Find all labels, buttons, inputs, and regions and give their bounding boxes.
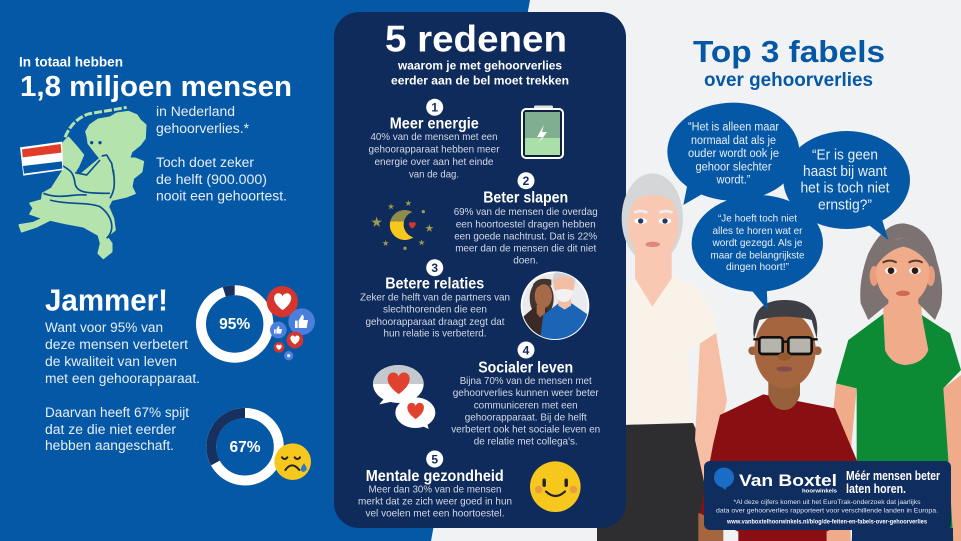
reason 2: beter slapen: 2 [523, 174, 530, 188]
quote 1: wordt.” [716, 175, 751, 187]
slogan: laten horen. [846, 482, 906, 496]
reason 2: beter slapen: meer dan de mensen die dit niet [455, 243, 596, 255]
text: 95 percent [45, 320, 200, 386]
person: man with glasses [698, 300, 858, 541]
text: 95 percent: met een gehoorapparaat. [45, 371, 200, 386]
reason 3: betere relaties: gehoorapparaat draagt zegt dat [366, 316, 505, 328]
reason 2: beter slapen: Beter slapen [483, 190, 568, 207]
person: woman in green shirt [827, 223, 961, 541]
intro heading: In totaal hebben [19, 54, 123, 70]
reason 1: meer energie: gehoorapparaat hebben meer [368, 144, 500, 156]
reason 4: socialer leven: Bijna 70% van de mensen met [460, 375, 592, 387]
logo: Van Boxtel: hoorwinkels [802, 489, 837, 495]
icon: social reactions [267, 286, 315, 360]
reason 2: beter slapen: 69% van de mensen die overdag [454, 206, 598, 218]
quote 1: “Het is alleen maar [688, 122, 779, 134]
reason 4: socialer leven: communiceren met een [474, 399, 578, 411]
intro heading: 1,8 miljoen mensen [20, 71, 292, 103]
icon: smiley [530, 461, 581, 512]
panel heading: waarom je met gehoorverlies [397, 60, 562, 72]
reason 1: meer energie: energie over aan het einde [374, 156, 494, 168]
quote 1: normaal dat als je [691, 135, 776, 147]
reason 2: beter slapen: doen. [513, 254, 538, 266]
reason 5: mentale gezondheid: merkt dat ze zich weer goed in hun [358, 496, 512, 508]
reason 3: betere relaties: Zeker de helft van de partners van [360, 292, 510, 304]
slogan: Méér mensen beter [846, 469, 940, 483]
icon: battery [522, 106, 563, 158]
reason 5: mentale gezondheid: vel voelen met een hoortoestel. [366, 508, 504, 520]
logo: Van Boxtel [714, 468, 837, 495]
text: 95 percent: de kwaliteit van leven [45, 354, 177, 369]
quote 2: ernstig?” [818, 196, 872, 213]
quote 2: haast bij want [803, 163, 888, 180]
reason 1: meer energie: van de dag. [409, 168, 459, 180]
quote 2: het is toch niet [800, 180, 890, 197]
icon: speech bubbles with hearts [373, 365, 435, 429]
heading: Jammer: Jammer! [45, 282, 168, 318]
intro heading [19, 54, 292, 103]
icon: moon and stars [371, 200, 433, 250]
text: 67 percent: hebben aangeschaft. [45, 438, 174, 453]
reason 3: betere relaties [360, 259, 510, 340]
footnote and url: www.vanboxtelhoorwinkels.nl/blog/de-feiten-en-fabels-over-gehoorverlies [726, 519, 928, 525]
text: 67 percent [45, 405, 189, 453]
reason 5: mentale gezondheid [358, 450, 512, 520]
quote 3: maar de belangrijkste [710, 249, 805, 261]
reason 3: betere relaties: Betere relaties [385, 276, 484, 293]
panel heading: eerder aan de bel moet trekken [391, 76, 569, 88]
intro text: Toch doet zeker [156, 155, 255, 170]
intro text [156, 104, 287, 204]
intro text: gehoorverlies.* [156, 121, 250, 136]
reason 2: beter slapen: een goede nachtrust. Dat is 22% [454, 230, 597, 242]
reason 5: mentale gezondheid: Mentale gezondheid [366, 468, 504, 485]
footnote and url: data over gehoorverlies rapporteert voor verschillende landen in Europa. [716, 508, 938, 514]
donut chart 95 percent: 95% [219, 316, 250, 333]
quote 3: alles te horen wat er [712, 225, 803, 237]
map of the Netherlands with flag [19, 107, 146, 258]
reason 4: socialer leven: 4 [523, 343, 530, 357]
quote 2 [800, 146, 890, 213]
reason 5: mentale gezondheid: Meer dan 30% van de mensen [368, 484, 502, 496]
reason 3: betere relaties: slechthorenden die een [383, 304, 487, 316]
donut chart 95 percent [201, 290, 268, 358]
quote 3: dingen hoort!” [726, 261, 789, 273]
person: older woman [620, 173, 727, 500]
panel: 5 redenen [334, 12, 626, 528]
reason 4: socialer leven [451, 342, 600, 447]
skirt of older woman behind panel [597, 423, 710, 541]
quote 3: “Je hoeft toch niet [718, 213, 797, 225]
donut chart 67 percent: 67% [229, 439, 261, 456]
footnote and url: *Al deze cijfers komen uit het EuroTrak-onderzoek dat jaarlijks [734, 499, 921, 506]
logo: Van Boxtel: Van Boxtel [739, 471, 837, 490]
text: 95 percent: deze mensen verbetert [45, 337, 188, 352]
reason 4: socialer leven: Socialer leven [478, 359, 573, 376]
intro text: nooit een gehoortest. [156, 188, 287, 204]
donut chart 67 percent [211, 413, 279, 481]
text: 67 percent: dat ze die niet eerder [45, 422, 177, 437]
quote 1: gehoor slechter [696, 161, 772, 173]
icon: sad face [274, 443, 311, 480]
navy trousers below banner [852, 528, 953, 541]
footnote and url [716, 499, 938, 525]
intro text: de helft (900.000) [156, 172, 267, 187]
footer banner: Van Boxtel [704, 461, 951, 530]
icon: couple portrait [521, 269, 590, 340]
reason 4: socialer leven: de relatie met collega's. [474, 435, 578, 447]
text: 67 percent: Daarvan heeft 67% spijt [45, 405, 189, 420]
reason 2: beter slapen: een hoortoestel dragen hebben [456, 218, 596, 230]
quote 1: ouder wordt ook je [688, 148, 779, 160]
quote 3 [710, 213, 805, 273]
reason 3: betere relaties: hun relatie is verbeterd. [384, 328, 486, 340]
speech bubbles [667, 103, 910, 310]
reason 4: socialer leven: verbetert ook het sociale leven en [451, 423, 600, 435]
heading: top 3 fabels: over gehoorverlies [704, 70, 873, 91]
reason 1: meer energie: 1 [431, 101, 438, 115]
intro text: in Nederland [156, 104, 235, 119]
text: 95 percent: Want voor 95% van [45, 320, 163, 335]
reason 1: meer energie: 40% van de mensen met een [370, 131, 498, 143]
panel heading: 5 redenen [385, 18, 567, 60]
quote 1 [688, 122, 779, 187]
reason 4: socialer leven: gehoorverlies kunnen weer beter [453, 387, 599, 399]
quote 3: wordt gezegd. Als je [712, 237, 803, 249]
reason 4: socialer leven: gehoorapparaat. Bij de helft [465, 411, 587, 423]
quote 2: “Er is geen [812, 146, 878, 164]
reason 3: betere relaties: 3 [431, 261, 438, 275]
panel heading [385, 18, 569, 88]
heading: top 3 fabels [693, 34, 885, 91]
reason 1: meer energie: Meer energie [390, 116, 479, 133]
reason 1: meer energie [368, 99, 500, 180]
reason 2: beter slapen [454, 172, 598, 266]
slogan [846, 469, 940, 496]
heading: top 3 fabels: Top 3 fabels [693, 34, 885, 69]
reason 5: mentale gezondheid: 5 [431, 452, 438, 466]
